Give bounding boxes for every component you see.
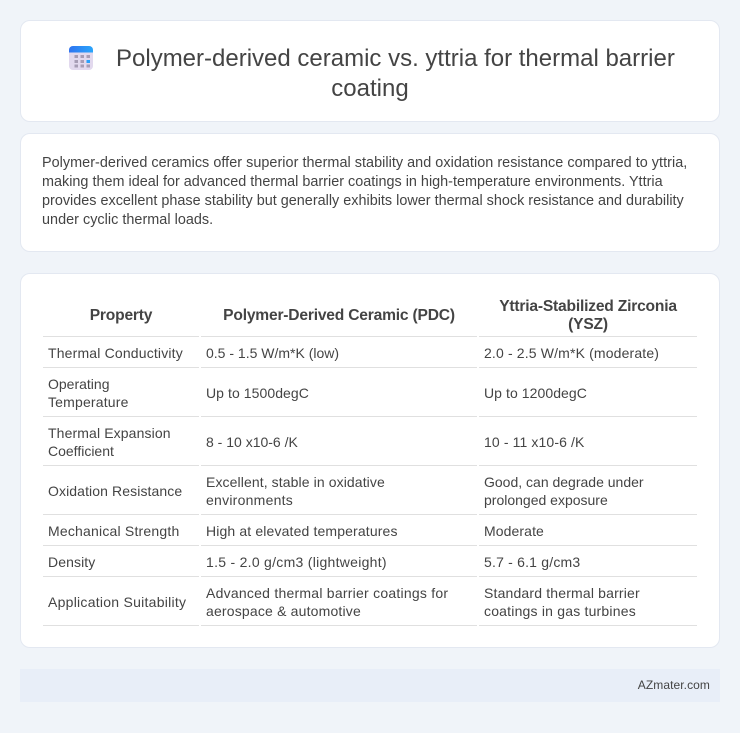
row: thermal expansion coefficient: Coefficient — [48, 443, 114, 459]
title: Polymer-derived ceramic vs. yttria for thermal barrier — [116, 45, 675, 72]
row: density: Density — [48, 554, 95, 570]
title: coating — [331, 75, 409, 102]
row: operating temperature: Operating — [48, 376, 109, 392]
row: operating temperature: Up to 1200degC — [484, 385, 587, 401]
row: thermal conductivity: Thermal Conductivity — [48, 345, 183, 361]
text block: summary: Polymer-derived ceramics offer superior thermal stability and oxidation resistance compared to yttria, — [42, 155, 687, 171]
row: mechanical strength: Moderate — [484, 523, 544, 539]
table header: (YSZ) — [568, 316, 608, 333]
panel: comparison table — [20, 273, 720, 648]
row: thermal expansion coefficient — [43, 416, 697, 459]
row: application suitability: aerospace & automotive — [206, 603, 361, 619]
row: thermal expansion coefficient: 10 - 11 x10-6 /K — [484, 434, 584, 450]
row: operating temperature: Up to 1500degC — [206, 385, 309, 401]
row: density: 5.7 - 6.1 g/cm3 — [484, 554, 580, 570]
title — [116, 45, 675, 102]
row: application suitability: Standard thermal barrier — [484, 585, 640, 601]
row: oxidation resistance: prolonged exposure — [484, 492, 608, 508]
row: application suitability: Advanced thermal barrier coatings for — [206, 585, 448, 601]
row: oxidation resistance — [43, 465, 697, 508]
row: thermal expansion coefficient: 8 - 10 x10-6 /K — [206, 434, 298, 450]
table header: Yttria-Stabilized Zirconia — [499, 298, 677, 315]
row: density — [43, 545, 697, 570]
row: density: 1.5 - 2.0 g/cm3 (lightweight) — [206, 554, 387, 570]
footer credit: AZmater.com — [638, 678, 710, 692]
row: application suitability: Application Suitability — [48, 594, 186, 610]
row: mechanical strength: High at elevated temperatures — [206, 523, 398, 539]
icon: calendar — [69, 46, 93, 70]
panel: header — [20, 20, 720, 122]
row: oxidation resistance: environments — [206, 492, 293, 508]
text block: summary: under cyclic thermal loads. — [42, 212, 213, 228]
text block: summary: provides excellent phase stability but generally exhibits lower thermal shock resistance and durability — [42, 193, 684, 209]
row: thermal conductivity: 0.5 - 1.5 W/m*K (low) — [206, 345, 339, 361]
row: oxidation resistance: Good, can degrade under — [484, 474, 644, 490]
row: mechanical strength — [43, 514, 697, 539]
row: operating temperature: Temperature — [48, 394, 129, 410]
text block: summary: making them ideal for advanced thermal barrier coatings in high-temperature environments. Yttria — [42, 174, 663, 190]
row: application suitability — [43, 576, 697, 626]
row: thermal conductivity: 2.0 - 2.5 W/m*K (moderate) — [484, 345, 659, 361]
text block: summary — [42, 155, 687, 228]
panel: summary text — [20, 133, 720, 252]
table header: Polymer-Derived Ceramic (PDC) — [223, 307, 455, 324]
table header: Property — [90, 307, 152, 324]
row: thermal expansion coefficient: Thermal Expansion — [48, 425, 171, 441]
row: oxidation resistance: Excellent, stable in oxidative — [206, 474, 385, 490]
table header — [90, 298, 678, 333]
footer bar — [20, 669, 720, 702]
row: application suitability: coatings in gas turbines — [484, 603, 636, 619]
row: operating temperature — [43, 367, 697, 410]
row: thermal conductivity — [43, 336, 697, 361]
row: oxidation resistance: Oxidation Resistance — [48, 483, 182, 499]
row: mechanical strength: Mechanical Strength — [48, 523, 179, 539]
